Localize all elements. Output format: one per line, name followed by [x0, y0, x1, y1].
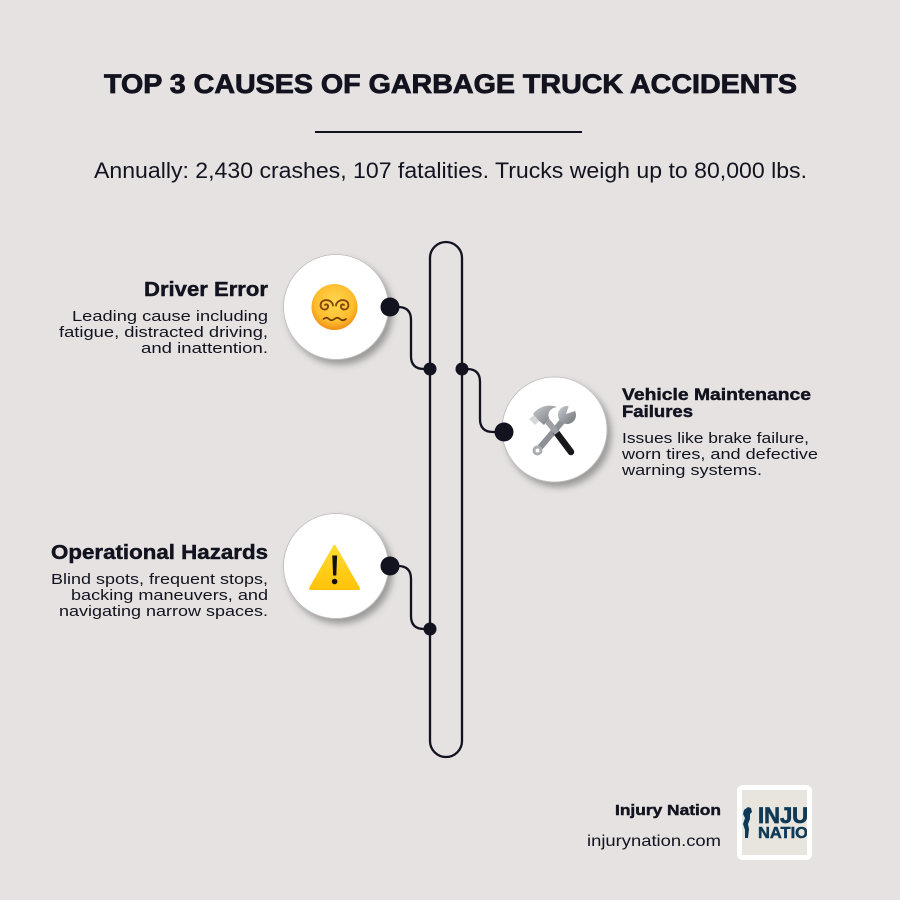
- connector: operational hazards: [380, 556, 436, 636]
- panel: vehicle maintenance failures: [456, 362, 818, 482]
- icon: warning sign: [310, 546, 358, 588]
- icon: dizzy face emoji: [312, 284, 358, 330]
- vehicle maintenance text: worn tires, and defective: [621, 446, 818, 463]
- driver error text: [59, 279, 268, 357]
- vehicle maintenance text: Issues like brake failure,: [622, 430, 809, 447]
- vehicle maintenance text: warning systems.: [621, 462, 762, 479]
- infographic canvas: [52, 74, 818, 860]
- connector: driver error: [380, 298, 436, 376]
- panel: driver error: [59, 254, 436, 376]
- footer logo: NATIO: [758, 825, 808, 842]
- operational hazards text: [51, 542, 268, 620]
- driver error text: Driver Error: [144, 279, 268, 301]
- subtitle: Annually: 2,430 crashes, 107 fatalities. Trucks weigh up to 80,000 lbs.: [94, 158, 807, 183]
- vehicle maintenance text: Failures: [622, 402, 693, 421]
- driver error icon circle: [284, 254, 388, 360]
- footer brand text: [587, 802, 721, 850]
- footer logo: [737, 785, 812, 860]
- icon: hammer and wrench: [529, 402, 581, 456]
- operational hazards text: backing maneuvers, and: [71, 587, 268, 604]
- driver error text: fatigue, distracted driving,: [59, 324, 268, 341]
- panel: operational hazards: [51, 514, 436, 636]
- connector: vehicle maintenance: [456, 362, 514, 442]
- driver error text: and inattention.: [141, 340, 268, 357]
- vehicle maintenance text: Vehicle Maintenance: [622, 385, 811, 404]
- title: TOP 3 CAUSES OF GARBAGE TRUCK ACCIDENTS: [104, 69, 797, 99]
- footer brand text: Injury Nation: [615, 802, 721, 819]
- driver error text: Leading cause including: [72, 308, 268, 325]
- footer brand text: injurynation.com: [587, 833, 721, 850]
- operational hazards icon circle: [284, 514, 388, 618]
- vehicle maintenance text: [621, 385, 818, 479]
- vehicle maintenance icon circle: [502, 377, 607, 482]
- operational hazards text: Blind spots, frequent stops,: [51, 571, 268, 588]
- operational hazards text: navigating narrow spaces.: [59, 603, 268, 620]
- footer logo: INJU: [758, 803, 808, 828]
- operational hazards text: Operational Hazards: [51, 542, 268, 564]
- central track: [430, 242, 462, 757]
